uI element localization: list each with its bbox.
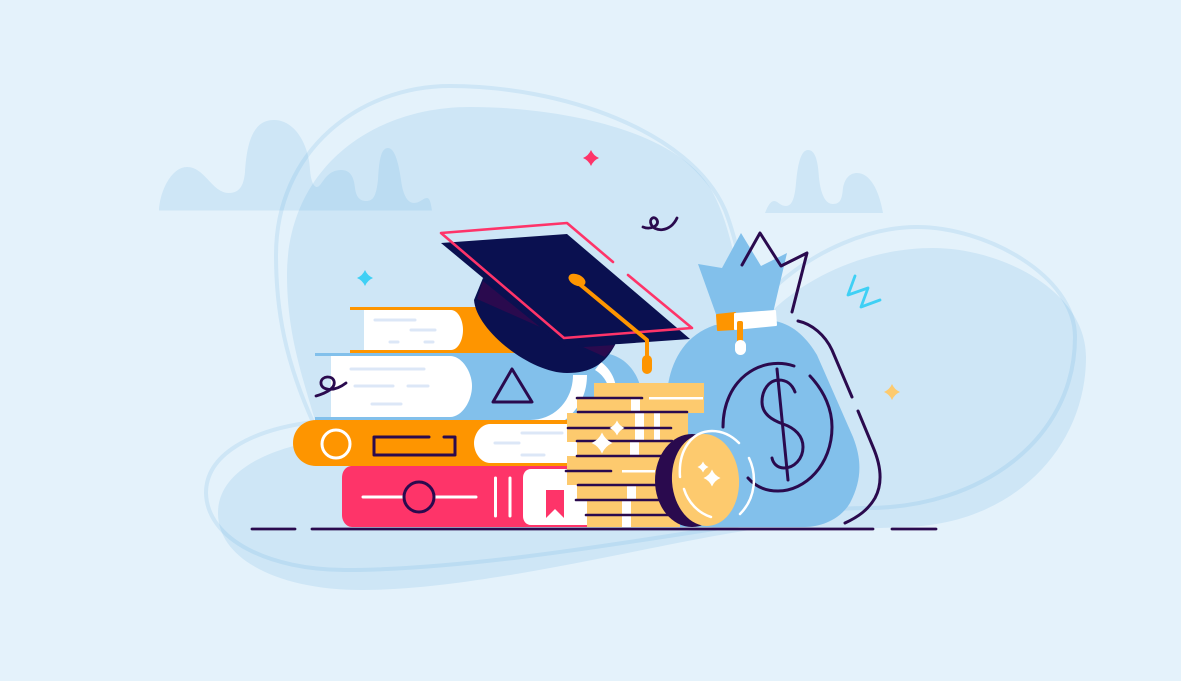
dollar sign: [762, 369, 803, 480]
label frame: [374, 437, 455, 455]
ring icon: [322, 430, 350, 458]
sparkle: pink: [583, 150, 599, 166]
sparkle: coin stack small: [610, 420, 624, 436]
orange pages: [364, 310, 463, 350]
book: blue: [315, 353, 642, 420]
ground line: [252, 528, 936, 530]
coin blocks: [567, 383, 704, 527]
book: red: [342, 466, 595, 527]
coin back: [655, 434, 729, 527]
cap skull: [474, 278, 616, 373]
cloud: left: [159, 120, 432, 210]
squiggle: left: [316, 377, 346, 396]
bag body: [650, 321, 859, 527]
bookmark: [546, 490, 564, 518]
slider knob: [404, 482, 434, 512]
background blob: [218, 107, 1086, 590]
coin stack: [566, 383, 704, 527]
sparkle: cyan: [357, 270, 373, 286]
zigzag: cyan: [848, 276, 880, 307]
cap pink outline: [441, 223, 692, 338]
dollar circle: [723, 363, 832, 491]
graduation cap: [441, 223, 692, 374]
blue cover stripes: [530, 375, 587, 420]
red cover: [342, 466, 595, 527]
bag crown: [698, 233, 787, 317]
cap board: [441, 234, 690, 346]
squiggle: top: [643, 218, 677, 230]
tassel cord: [577, 282, 647, 360]
sparkle: coin stack large: [592, 432, 612, 454]
book: top orange: [350, 307, 520, 353]
red pages: [523, 469, 595, 525]
blue cover: [315, 353, 642, 420]
coin sparkle large: [704, 470, 720, 486]
crown outline: [742, 233, 807, 312]
coin sparkle small: [698, 462, 708, 472]
slider line: [363, 478, 510, 516]
cap shadow left: [477, 281, 540, 327]
bag tie: [717, 313, 735, 330]
money bag: [650, 233, 880, 527]
front coin: [655, 431, 754, 528]
sparkle: gold: [884, 384, 900, 400]
coin edge lines: [566, 398, 687, 515]
bag tag: [737, 321, 743, 343]
orange cover: [350, 307, 520, 353]
middle cover: [293, 420, 590, 466]
book: middle orange: [293, 420, 590, 466]
triangle icon: [493, 369, 532, 402]
blue page lines: [351, 369, 428, 404]
blob outline: [206, 86, 1075, 570]
middle pages: [474, 424, 590, 463]
coin shine arcs: [680, 431, 754, 517]
blue pages: [331, 356, 472, 417]
middle page lines: [495, 433, 562, 455]
cloud: right: [765, 150, 883, 213]
bag outline dashes: [798, 321, 880, 523]
tassel knob: [567, 271, 587, 289]
coin highlights: [622, 397, 703, 527]
tassel end: [642, 355, 652, 374]
background clouds: [159, 120, 883, 213]
orange page lines: [375, 320, 435, 342]
cap shadow right: [583, 345, 615, 357]
coin face: [669, 432, 742, 528]
